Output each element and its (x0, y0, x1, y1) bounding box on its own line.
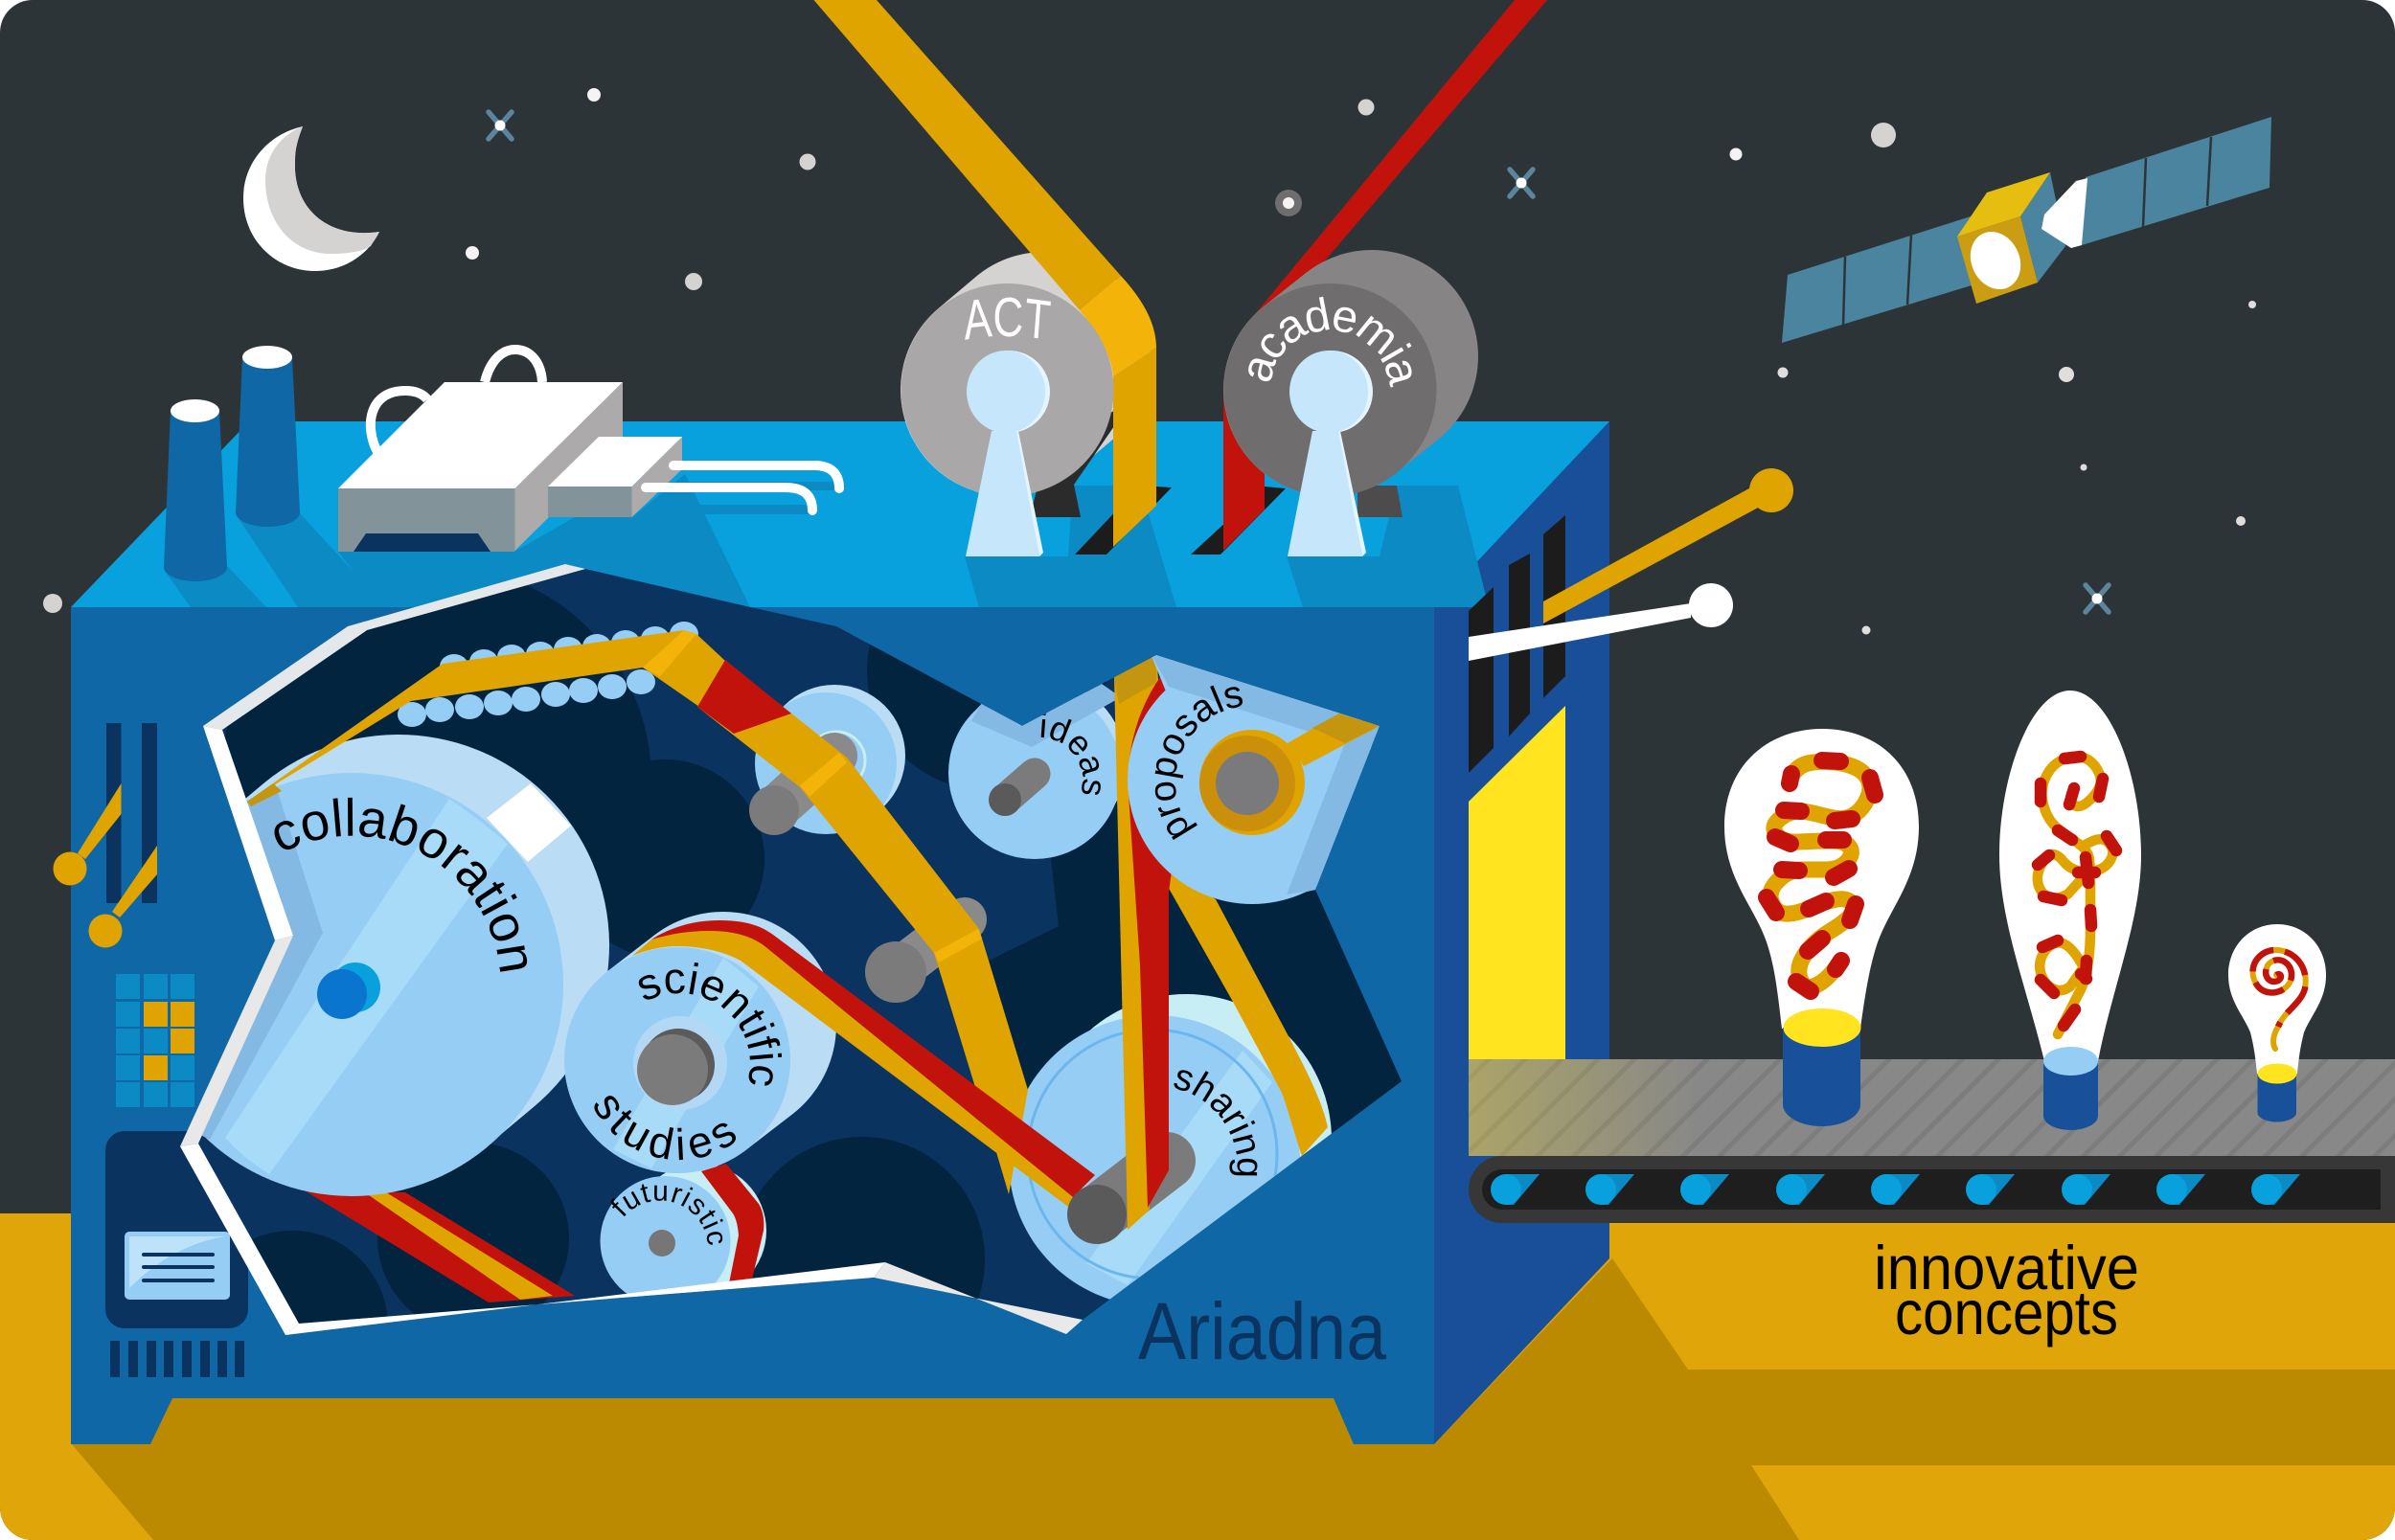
caption: innovative concepts (1874, 1233, 2139, 1348)
gold upper belt (247, 630, 725, 806)
diagonal gold and red belts (632, 920, 1095, 1207)
label: academia: academia (1248, 297, 1412, 387)
spool: academia (1223, 250, 1475, 494)
title: Ariadna: Ariadna (1138, 1286, 1386, 1376)
spool: ACT (814, 0, 1156, 547)
white lever (1469, 583, 1733, 661)
keyhole: ACT (966, 351, 1050, 556)
caption: innovative concepts: innovative (1874, 1233, 2139, 1302)
machine side face (1434, 421, 1609, 1444)
disc: ideas (948, 684, 1117, 859)
label: scientific: scientific (638, 962, 782, 1086)
machine top face (71, 421, 1609, 607)
gold lever (1543, 468, 1793, 623)
stars (43, 88, 2256, 634)
indicator grid (116, 974, 194, 1107)
axle of sharing disc (1067, 1161, 1167, 1244)
label: ACT: ACT (965, 297, 1051, 340)
label: ideas: ideas (1040, 713, 1101, 795)
gold belt centre diagonal (697, 661, 1028, 1194)
vent bars (110, 1341, 244, 1377)
machine front face (71, 607, 1434, 1444)
light bulb: tall (1999, 691, 2141, 1130)
vertical belts over axle (1119, 660, 1196, 1230)
plug device (338, 350, 839, 552)
machine cut-away interior (201, 569, 1402, 1324)
disc: futuristic (600, 1164, 766, 1297)
conveyor belt with rollers (1469, 1156, 2395, 1223)
control panel (105, 1131, 248, 1328)
disc: proposals (1128, 655, 1380, 904)
satellite (1782, 117, 2271, 343)
chimney (236, 346, 300, 527)
red belt section (697, 660, 791, 734)
bead chain (398, 622, 698, 727)
disc: scientific studies (564, 912, 1095, 1207)
disc: sharing (1011, 873, 1332, 1300)
ground (0, 1213, 2395, 1540)
axle (865, 919, 965, 1003)
gold belt joints (800, 753, 982, 962)
chimney (164, 399, 227, 581)
red belt from academia (1223, 0, 1547, 551)
side windows (1469, 515, 1565, 773)
moon (243, 126, 379, 271)
yellow door (1469, 706, 1565, 1059)
belt slots (1075, 486, 1286, 555)
machine plinth shadow (150, 1398, 1354, 1444)
conveyor surface (1469, 1059, 2395, 1156)
spool foot (1357, 486, 1403, 517)
caption: innovative concepts: concepts (1895, 1278, 2118, 1348)
label: futuristic: futuristic (611, 1184, 723, 1245)
cut-away wall edges (180, 564, 1083, 1335)
label: collaboration: collaboration (274, 797, 527, 972)
light bulb: small (2228, 924, 2326, 1121)
vertical gold belt (1114, 655, 1169, 1230)
disc: collaboration (201, 735, 609, 1196)
floor shadow (72, 1258, 2395, 1540)
left control slots and levers (54, 723, 157, 948)
lower-left belts (303, 1189, 575, 1302)
gold belt from ACT (814, 0, 1156, 547)
label: sharing: sharing (1174, 1070, 1257, 1176)
keyhole: academia (1288, 351, 1373, 556)
disc: small wheel with axle (749, 685, 905, 835)
gold belt right (1169, 873, 1328, 1156)
light bulb: large (1724, 729, 1919, 1126)
label: studies: studies (594, 1096, 736, 1161)
label: proposals: proposals (1155, 686, 1243, 840)
